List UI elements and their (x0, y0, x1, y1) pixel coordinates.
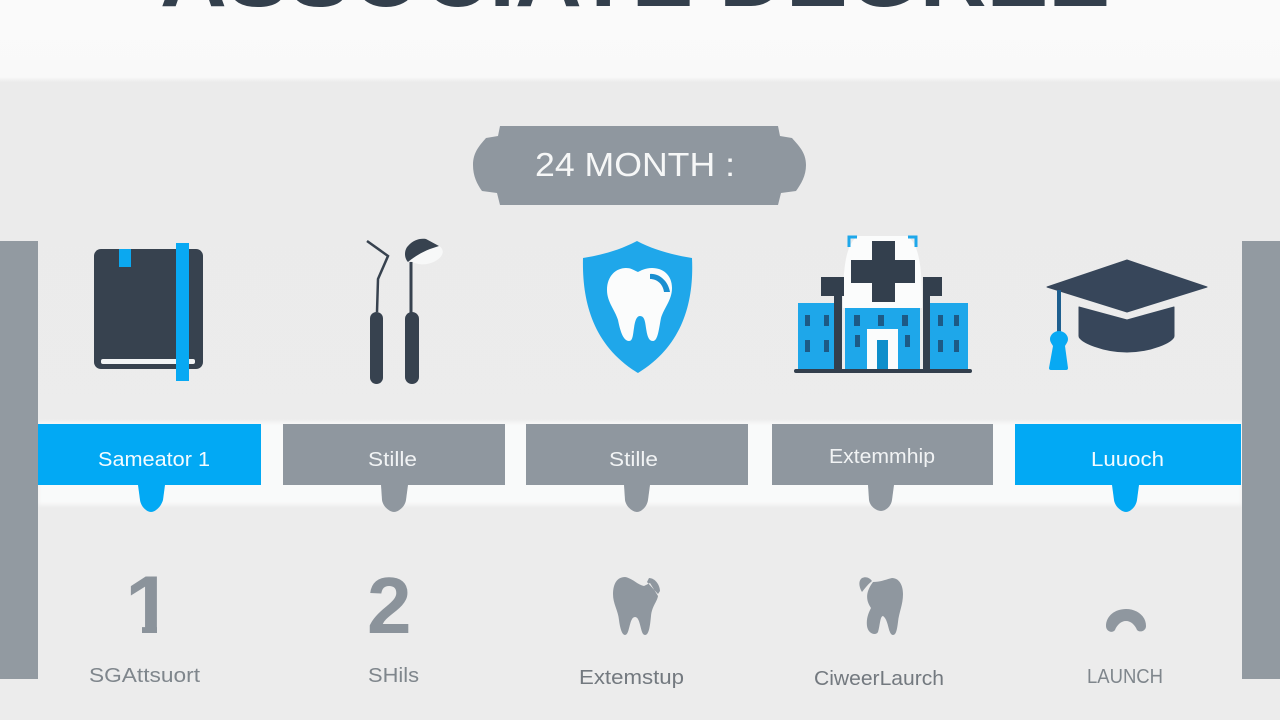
step number 2: 2 (367, 561, 412, 650)
right side bar (1242, 241, 1280, 679)
icon: dental instruments (367, 239, 445, 384)
icon: notebook (94, 243, 203, 381)
icon: tooth grey, step 4 (859, 577, 903, 635)
step caption 5: LAUNCH (1087, 666, 1163, 688)
step caption 2: SHils (368, 665, 419, 687)
step caption 3: Extemstup (579, 667, 684, 689)
stage tab 4: externship (772, 424, 993, 511)
stage tab 5: launch: Luuoch (1091, 449, 1164, 471)
step number 1: 1 (125, 559, 173, 655)
stage tab 2: skills (283, 424, 505, 512)
badge text: 24 MONTH : (535, 146, 735, 183)
stage tab 1: semester (38, 424, 261, 512)
timeline light band (38, 422, 1242, 505)
stage tab 3: skills (526, 424, 748, 512)
left side bar (0, 241, 38, 679)
icon: tooth grey, step 3 (613, 577, 660, 635)
stage tab 4: externship: Extemmhip (829, 446, 935, 468)
step caption 1: SGAttsuort (89, 665, 201, 687)
icon: tooth shield (583, 241, 692, 373)
stage tab 3: skills: Stille (609, 449, 658, 471)
icon: graduation cap (1047, 260, 1207, 370)
step caption 4: CiweerLaurch (814, 668, 944, 690)
icon: hospital building (794, 236, 972, 373)
icon: arch grey, step 5 (1106, 609, 1146, 632)
stage tab 1: semester: Sameator 1 (98, 449, 210, 471)
stage tab 5: launch (1015, 424, 1241, 512)
duration badge (473, 126, 806, 205)
stage tab 2: skills: Stille (368, 449, 417, 471)
